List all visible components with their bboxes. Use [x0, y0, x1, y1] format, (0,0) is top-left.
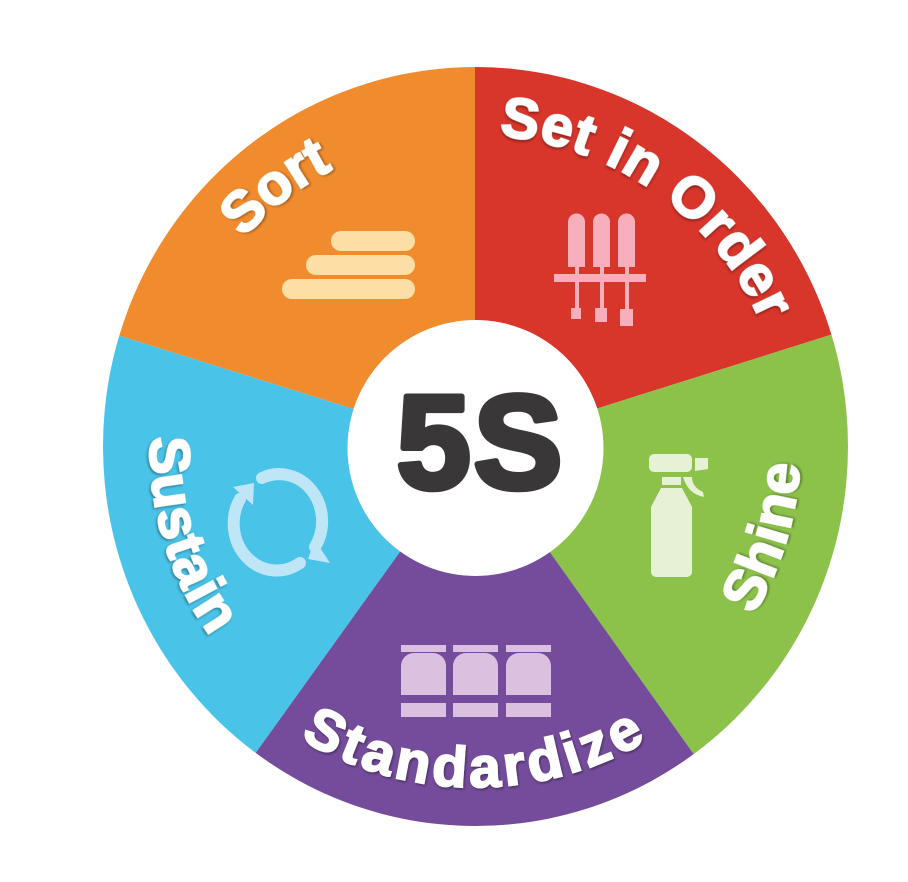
hub circle	[348, 320, 604, 576]
5S wheel infographic	[103, 67, 848, 826]
label: standardize: Standardize	[304, 708, 644, 792]
panel: set in order	[475, 67, 832, 408]
center hub	[348, 320, 604, 576]
title: 5S: 5S	[397, 369, 565, 517]
wedge: shine	[550, 334, 848, 754]
panel: shine	[550, 334, 848, 754]
panel: sustain	[103, 336, 400, 753]
icon: stacked items	[282, 231, 415, 299]
icon: screwdrivers on a rack	[554, 214, 646, 326]
label: sustain: Sustain	[146, 437, 232, 638]
wedge: sort	[119, 67, 475, 409]
label: shine: Shine	[723, 462, 804, 612]
icon: spray bottle	[649, 454, 708, 577]
wedge: standardize	[256, 552, 694, 826]
icon: circular arrows	[233, 474, 330, 571]
wedge: set in order	[475, 67, 832, 408]
panel: standardize	[256, 552, 694, 826]
wedge: sustain	[103, 336, 400, 753]
icon: row of labelled jars	[401, 645, 551, 717]
panel: sort	[119, 67, 475, 409]
label: set in order: Set in Order	[500, 96, 790, 317]
label: sort: Sort	[220, 138, 336, 234]
